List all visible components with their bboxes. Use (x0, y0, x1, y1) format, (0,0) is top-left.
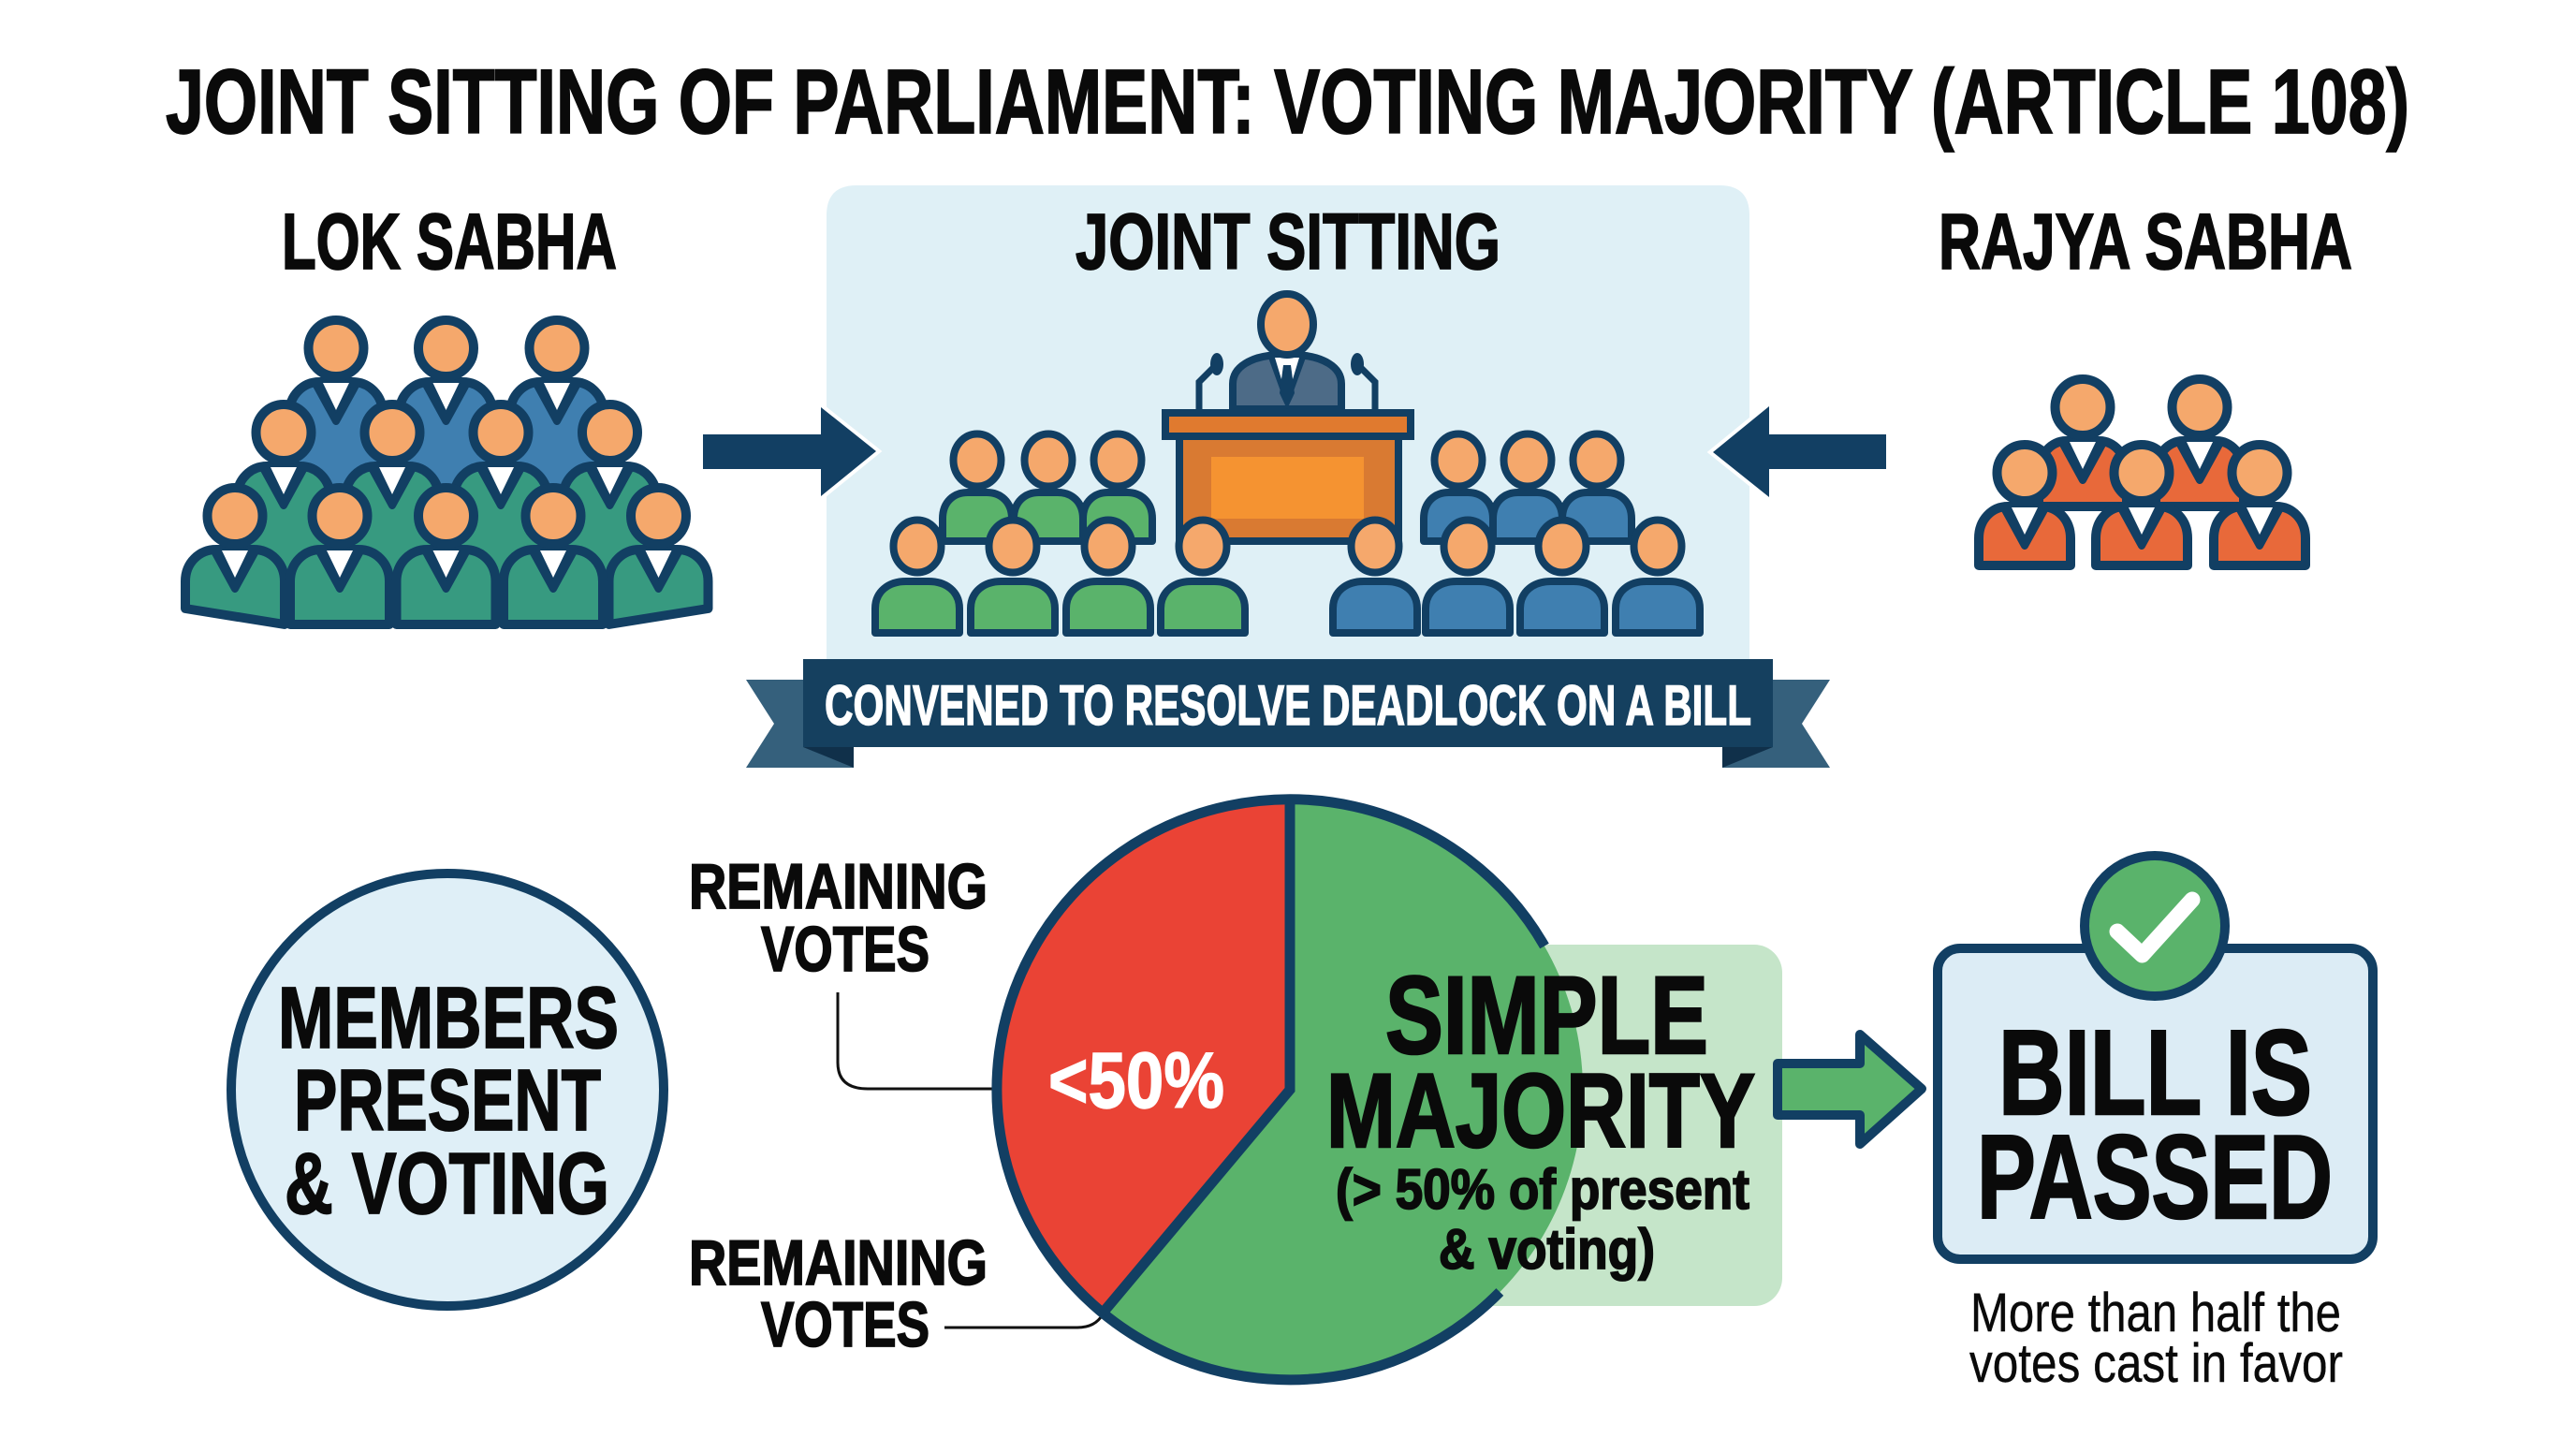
members present and voting circle: & VOTING (285, 1135, 609, 1232)
label: remaining votes top: REMAINING (689, 851, 988, 922)
panel: Joint Sitting (746, 185, 1830, 768)
icon: back row blue members (1424, 434, 1632, 541)
icon: Rajya Sabha members group (1979, 379, 2305, 565)
caption: more than half (1969, 1283, 2343, 1394)
arrow: Lok Sabha to Joint Sitting (703, 407, 876, 496)
caption: more than half: More than half the (1970, 1283, 2341, 1343)
members present and voting circle: PRESENT (294, 1051, 601, 1149)
text: simple majority: (> 50% of present (1336, 1158, 1749, 1221)
members present and voting circle (231, 873, 664, 1306)
pie slice: majority (1103, 800, 1583, 1380)
banner: convened to resolve deadlock (746, 659, 1830, 768)
text: simple majority (1326, 954, 1755, 1281)
icon: front row blue members (1333, 521, 1700, 633)
heading: Rajya Sabha: RAJYA SABHA (1939, 198, 2352, 286)
banner: convened to resolve deadlock: CONVENED TO RESOLVE DEADLOCK ON A BILL (825, 674, 1751, 737)
members present and voting circle: MEMBERS (278, 969, 619, 1066)
caption: more than half: votes cast in favor (1969, 1333, 2343, 1394)
label: remaining votes bottom (689, 1227, 1103, 1360)
icon: Lok Sabha members crowd (185, 320, 708, 624)
heading: Joint Sitting: JOINT SITTING (1076, 198, 1500, 286)
text: simple majority: & voting) (1439, 1218, 1655, 1281)
pie label: under 50 percent: <50% (1048, 1036, 1224, 1124)
text: bill is passed: PASSED (1977, 1110, 2333, 1243)
pie chart: votes (997, 800, 1583, 1380)
arrow: majority to bill passed (1778, 1034, 1922, 1144)
label: remaining votes top: VOTES (761, 914, 929, 985)
text: simple majority: SIMPLE (1385, 954, 1708, 1078)
text: simple majority: MAJORITY (1326, 1052, 1755, 1169)
label: remaining votes bottom: REMAINING (689, 1227, 988, 1299)
heading: Lok Sabha: LOK SABHA (282, 198, 617, 286)
icon: back row green members (943, 434, 1152, 541)
icon: speaker at podium (1165, 294, 1411, 541)
panel: Lok Sabha (185, 198, 708, 624)
icon: green check (2085, 856, 2225, 996)
pie outline (997, 800, 1544, 1380)
label: remaining votes top (689, 851, 992, 1089)
panel: bill is passed (1938, 856, 2373, 1259)
text: bill is passed (1977, 1005, 2333, 1243)
simple majority highlight box (1451, 945, 1782, 1306)
icon: front row green members (875, 521, 1245, 633)
panel background (827, 185, 1749, 665)
arrow: Rajya Sabha to Joint Sitting (1713, 406, 1886, 497)
pie slice: under 50 percent (997, 800, 1290, 1313)
text: bill is passed: BILL IS (1998, 1005, 2312, 1140)
panel: Rajya Sabha (1939, 198, 2352, 565)
label: remaining votes bottom: VOTES (761, 1289, 929, 1360)
